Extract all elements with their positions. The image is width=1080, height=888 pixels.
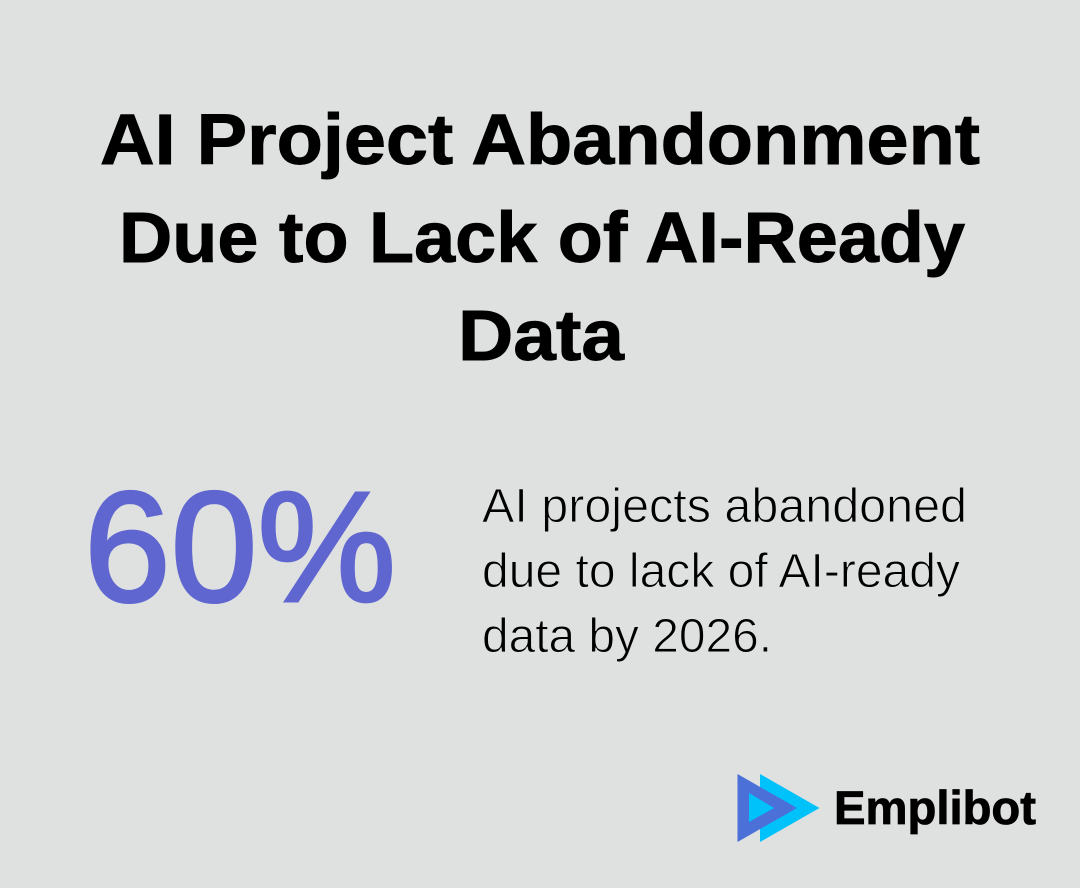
statistic description bbox=[482, 480, 967, 663]
title: Data bbox=[458, 297, 625, 376]
icon: play arrows bbox=[738, 774, 820, 842]
statistic description: AI projects abandoned bbox=[482, 480, 967, 533]
title: AI Project Abandonment bbox=[100, 101, 980, 180]
title: Due to Lack of AI-Ready bbox=[119, 199, 966, 278]
big statistic: 60%: 60% bbox=[84, 460, 396, 635]
title bbox=[100, 101, 980, 376]
logo: Emplibot bbox=[738, 774, 1036, 842]
statistic description: due to lack of AI-ready bbox=[482, 545, 960, 598]
logo wordmark: Emplibot bbox=[834, 781, 1036, 834]
statistic description: data by 2026. bbox=[482, 610, 772, 663]
